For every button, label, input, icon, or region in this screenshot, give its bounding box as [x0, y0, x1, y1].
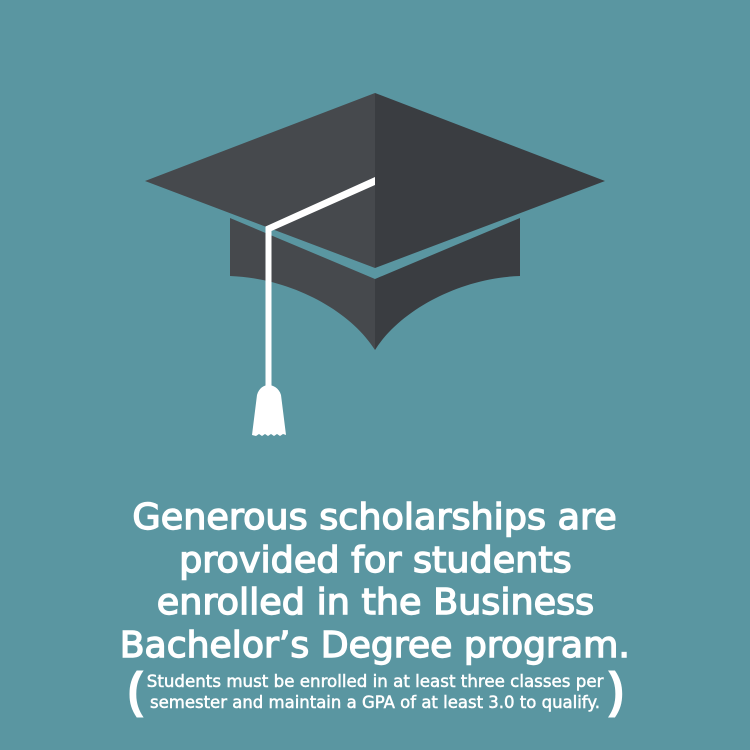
- tassel cord: [266, 177, 375, 390]
- footnote: [127, 662, 625, 718]
- footnote text: semester and maintain a GPA of at least 3.0 to qualify.: [150, 693, 600, 712]
- heading: [120, 497, 630, 666]
- mortarboard: [145, 93, 605, 268]
- heading: Generous scholarships are: [133, 497, 617, 538]
- left parenthesis: (: [127, 662, 144, 718]
- heading: provided for students: [179, 540, 571, 581]
- heading: Bachelor’s Degree program.: [120, 625, 630, 666]
- cap base: [230, 218, 520, 350]
- tassel: [252, 385, 286, 436]
- footnote text: Students must be enrolled in at least three classes per: [147, 672, 603, 691]
- footnote text: [147, 672, 604, 712]
- right parenthesis: ): [608, 662, 625, 718]
- heading: enrolled in the Business: [156, 582, 594, 623]
